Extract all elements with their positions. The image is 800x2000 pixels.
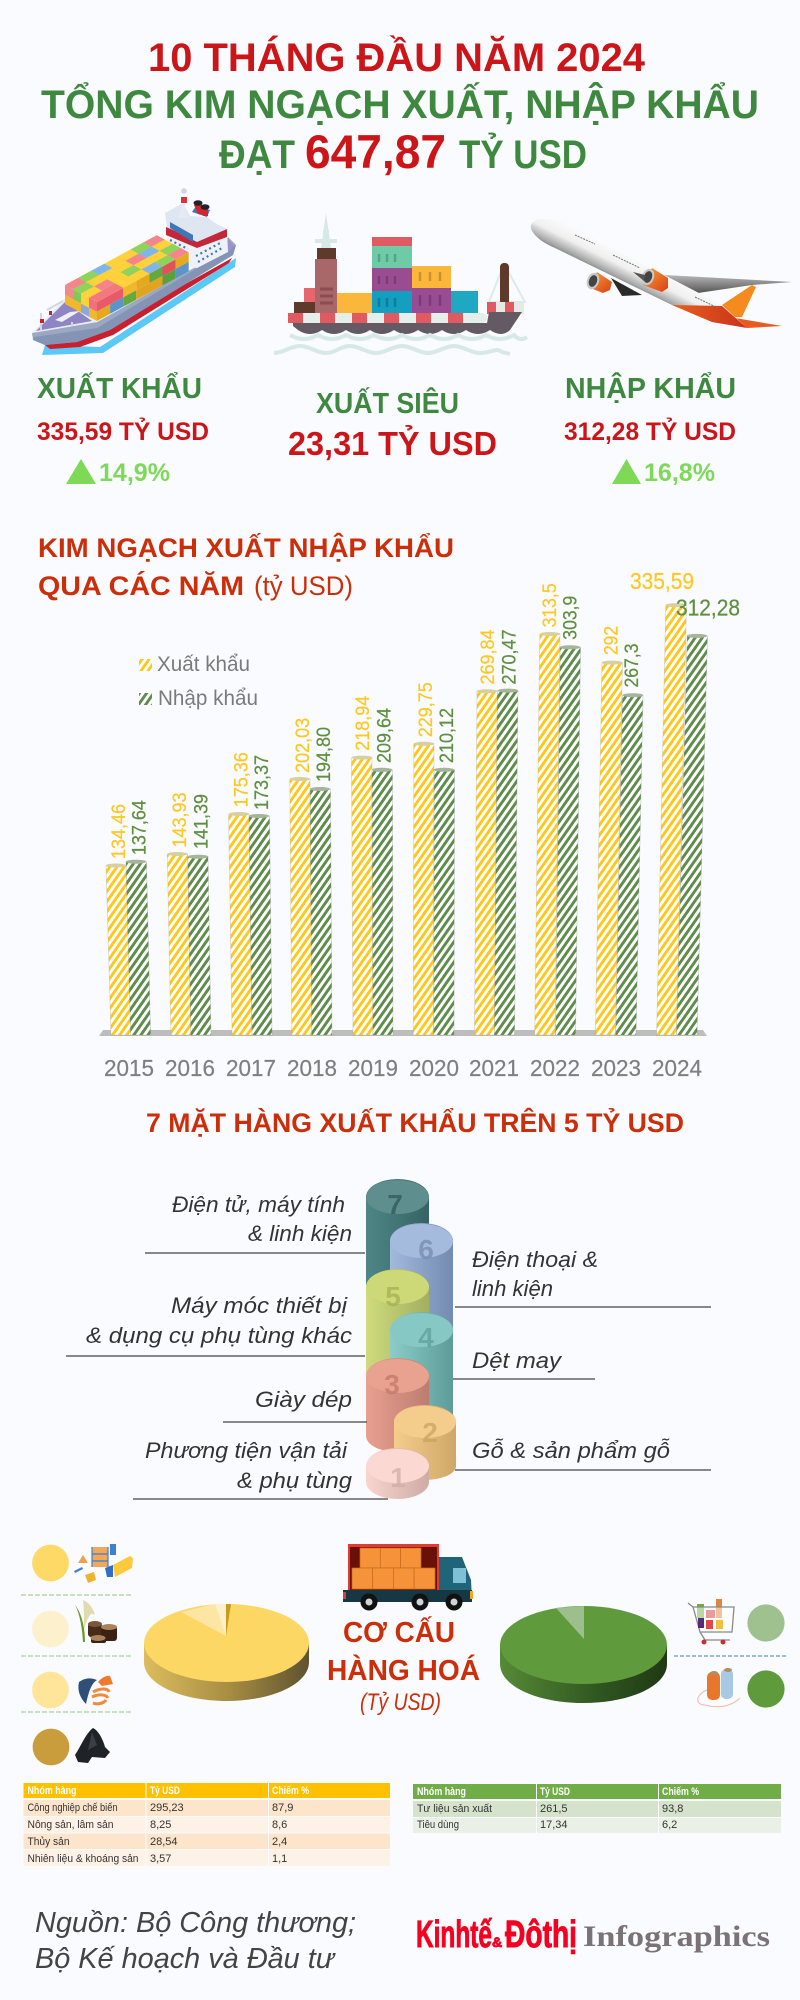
table: export groups: Thủy sản	[28, 1836, 70, 1848]
table: export groups: 295,23	[150, 1802, 184, 1814]
panel: import structure icons	[674, 1599, 786, 1708]
table: import groups: Tư liệu sản xuất	[417, 1803, 492, 1815]
table: export groups: 8,6	[272, 1819, 287, 1831]
title: 10 THÁNG ĐẦU NĂM 2024	[148, 34, 646, 80]
chart heading: QUA CÁC NĂM	[38, 570, 244, 601]
table: import groups: Nhóm hàng	[417, 1786, 466, 1798]
bars: import	[126, 636, 708, 1035]
block: trade surplus: XUẤT SIÊU	[316, 386, 459, 420]
value labels: 194,80	[314, 727, 335, 782]
year labels: 2017	[226, 1055, 276, 1081]
table: export groups: Nhóm hàng	[28, 1785, 76, 1797]
container stack top	[65, 235, 189, 302]
year labels: 2020	[409, 1055, 459, 1081]
value labels	[109, 568, 740, 859]
logo: Đôthị	[505, 1914, 577, 1956]
block: export: 14,9%	[99, 459, 170, 487]
chart heading: KIM NGẠCH XUẤT NHẬP KHẨU	[38, 532, 454, 563]
cylinder numbers: 3	[384, 1369, 400, 1400]
value labels: 269,84	[478, 629, 499, 684]
year labels: 2021	[469, 1055, 519, 1081]
bar chart	[99, 568, 740, 1081]
heading: goods structure: HÀNG HOÁ	[327, 1653, 480, 1687]
table: export groups: Công nghiệp chế biến	[28, 1802, 118, 1814]
icon: rice and logs	[75, 1600, 117, 1643]
item labels: Điện thoại &	[472, 1247, 598, 1272]
value labels: 143,93	[170, 792, 191, 848]
cylinder numbers: 2	[422, 1417, 438, 1448]
value labels: 175,36	[231, 752, 252, 807]
source note: Nguồn: Bộ Công thương;	[35, 1907, 356, 1939]
icon: coal	[75, 1728, 110, 1763]
title: 647,87	[305, 125, 446, 178]
table: import groups: 93,8	[662, 1803, 683, 1815]
item labels: linh kiện	[472, 1276, 553, 1301]
legend circles	[32, 1545, 69, 1765]
heading: goods structure	[327, 1615, 480, 1716]
block: trade surplus: 23,31 TỶ USD	[288, 425, 497, 462]
table: export groups: Nông sản, lâm sản	[28, 1819, 114, 1831]
icon: cargo ship (trade surplus)	[274, 213, 527, 354]
container stack sides	[97, 252, 189, 321]
value labels: 141,39	[192, 794, 213, 849]
pie chart: export structure	[144, 1604, 309, 1701]
source note	[35, 1907, 356, 1975]
item labels: & dụng cụ phụ tùng khác	[86, 1323, 352, 1348]
value labels: 218,94	[353, 695, 374, 751]
value labels: 292	[601, 626, 622, 655]
cylinder numbers: 7	[387, 1189, 403, 1220]
year labels: 2022	[530, 1055, 580, 1081]
year labels: 2024	[652, 1055, 702, 1081]
cylinder numbers: 1	[390, 1462, 406, 1493]
title	[41, 34, 759, 178]
item labels: Phương tiện vận tải	[145, 1438, 348, 1463]
logo	[416, 1914, 770, 1956]
logo: Infographics	[583, 1920, 770, 1953]
bars: export	[106, 605, 686, 1035]
chart heading: (tỷ USD)	[254, 571, 353, 601]
panel: export structure icons	[21, 1544, 133, 1765]
year labels: 2015	[104, 1055, 154, 1081]
block: export	[37, 371, 209, 487]
item labels	[66, 1192, 711, 1499]
table: export groups: Nhiên liệu & khoáng sản	[28, 1853, 138, 1865]
value labels: 202,03	[293, 718, 314, 773]
table: export groups	[24, 1783, 390, 1866]
year labels: 2016	[165, 1055, 215, 1081]
cylinder stack	[366, 1179, 456, 1499]
year labels	[104, 1055, 702, 1081]
item labels: Điện tử, máy tính	[172, 1192, 345, 1217]
table: import groups	[413, 1784, 781, 1833]
block: import: 16,8%	[644, 459, 715, 487]
chart legend: Nhập khẩu	[158, 687, 258, 710]
value labels: 134,46	[109, 804, 130, 859]
block: export: XUẤT KHẨU	[37, 371, 202, 405]
value labels: 303,9	[560, 596, 582, 640]
value labels: 229,75	[416, 682, 437, 737]
item labels: Giày dép	[255, 1387, 352, 1412]
cylinder numbers: 4	[418, 1322, 434, 1353]
block: import: NHẬP KHẨU	[565, 371, 736, 405]
icon: fish and shrimp	[78, 1676, 113, 1704]
chart legend	[139, 653, 258, 710]
value labels: 312,28	[676, 595, 740, 621]
table: import groups: Tỷ USD	[540, 1786, 570, 1798]
item labels: & phụ tùng	[237, 1468, 353, 1493]
year labels: 2019	[348, 1055, 398, 1081]
icon: airplane (import)	[531, 219, 792, 328]
bar caps	[106, 603, 686, 868]
table: export groups: 87,9	[272, 1802, 293, 1814]
table: export groups: 8,25	[150, 1819, 171, 1831]
table: import groups: 261,5	[540, 1803, 568, 1815]
icon: shopping cart	[688, 1599, 734, 1644]
icon: delivery truck	[343, 1544, 473, 1610]
title: TỔNG KIM NGẠCH XUẤT, NHẬP KHẨU	[41, 80, 759, 127]
block: import: 312,28 TỶ USD	[564, 416, 736, 446]
cylinder numbers: 6	[418, 1234, 434, 1265]
pie chart: import structure	[500, 1606, 667, 1703]
block: trade surplus	[288, 386, 497, 462]
icon: warehouse and truck	[74, 1544, 133, 1583]
table: import groups: Chiếm %	[662, 1786, 699, 1798]
source note: Bộ Kế hoạch và Đầu tư	[35, 1943, 337, 1975]
year labels: 2023	[591, 1055, 641, 1081]
title: TỶ USD	[459, 131, 587, 177]
table: import groups: Tiêu dùng	[417, 1819, 459, 1831]
heading: goods structure: CƠ CẤU	[343, 1615, 455, 1649]
cylinder numbers	[384, 1189, 438, 1493]
value labels: 210,12	[437, 708, 458, 763]
section heading: 7 export items: 7 MẶT HÀNG XUẤT KHẨU TRÊN 5 TỶ USD	[146, 1106, 684, 1138]
logo: Kinhtế	[416, 1914, 493, 1956]
icon: container ship (export)	[32, 188, 236, 355]
block: export: 335,59 TỶ USD	[37, 416, 209, 446]
value labels: 313,5	[540, 583, 561, 627]
title: ĐẠT	[219, 133, 295, 177]
value labels: 267,3	[622, 644, 643, 688]
block: import	[564, 371, 736, 487]
item labels: Máy móc thiết bị	[171, 1293, 348, 1318]
value labels: 209,64	[374, 708, 395, 763]
item labels: Gỗ & sản phẩm gỗ	[472, 1438, 670, 1463]
heading: goods structure: (Tỷ USD)	[360, 1689, 441, 1716]
table: export groups: 28,54	[150, 1836, 178, 1848]
item labels: Dệt may	[472, 1348, 563, 1373]
table: export groups: Chiếm %	[272, 1785, 309, 1797]
table: export groups: Tỷ USD	[150, 1785, 180, 1797]
table: import groups: 17,34	[540, 1819, 568, 1831]
superstructure	[167, 228, 228, 268]
cylinder numbers: 5	[385, 1281, 401, 1312]
value labels: 173,37	[252, 755, 273, 810]
value labels: 137,64	[129, 800, 150, 855]
icon: thread spools	[698, 1668, 740, 1707]
table: import groups: 6,2	[662, 1819, 677, 1831]
value labels: 335,59	[630, 568, 694, 594]
chart legend: Xuất khẩu	[157, 653, 250, 676]
table: export groups: 1,1	[272, 1853, 287, 1865]
item labels: & linh kiện	[248, 1221, 352, 1246]
table: export groups: 2,4	[272, 1836, 287, 1848]
logo: &	[492, 1934, 502, 1950]
table: export groups: 3,57	[150, 1853, 171, 1865]
chart heading	[38, 532, 454, 601]
value labels: 270,47	[499, 630, 520, 684]
year labels: 2018	[287, 1055, 337, 1081]
